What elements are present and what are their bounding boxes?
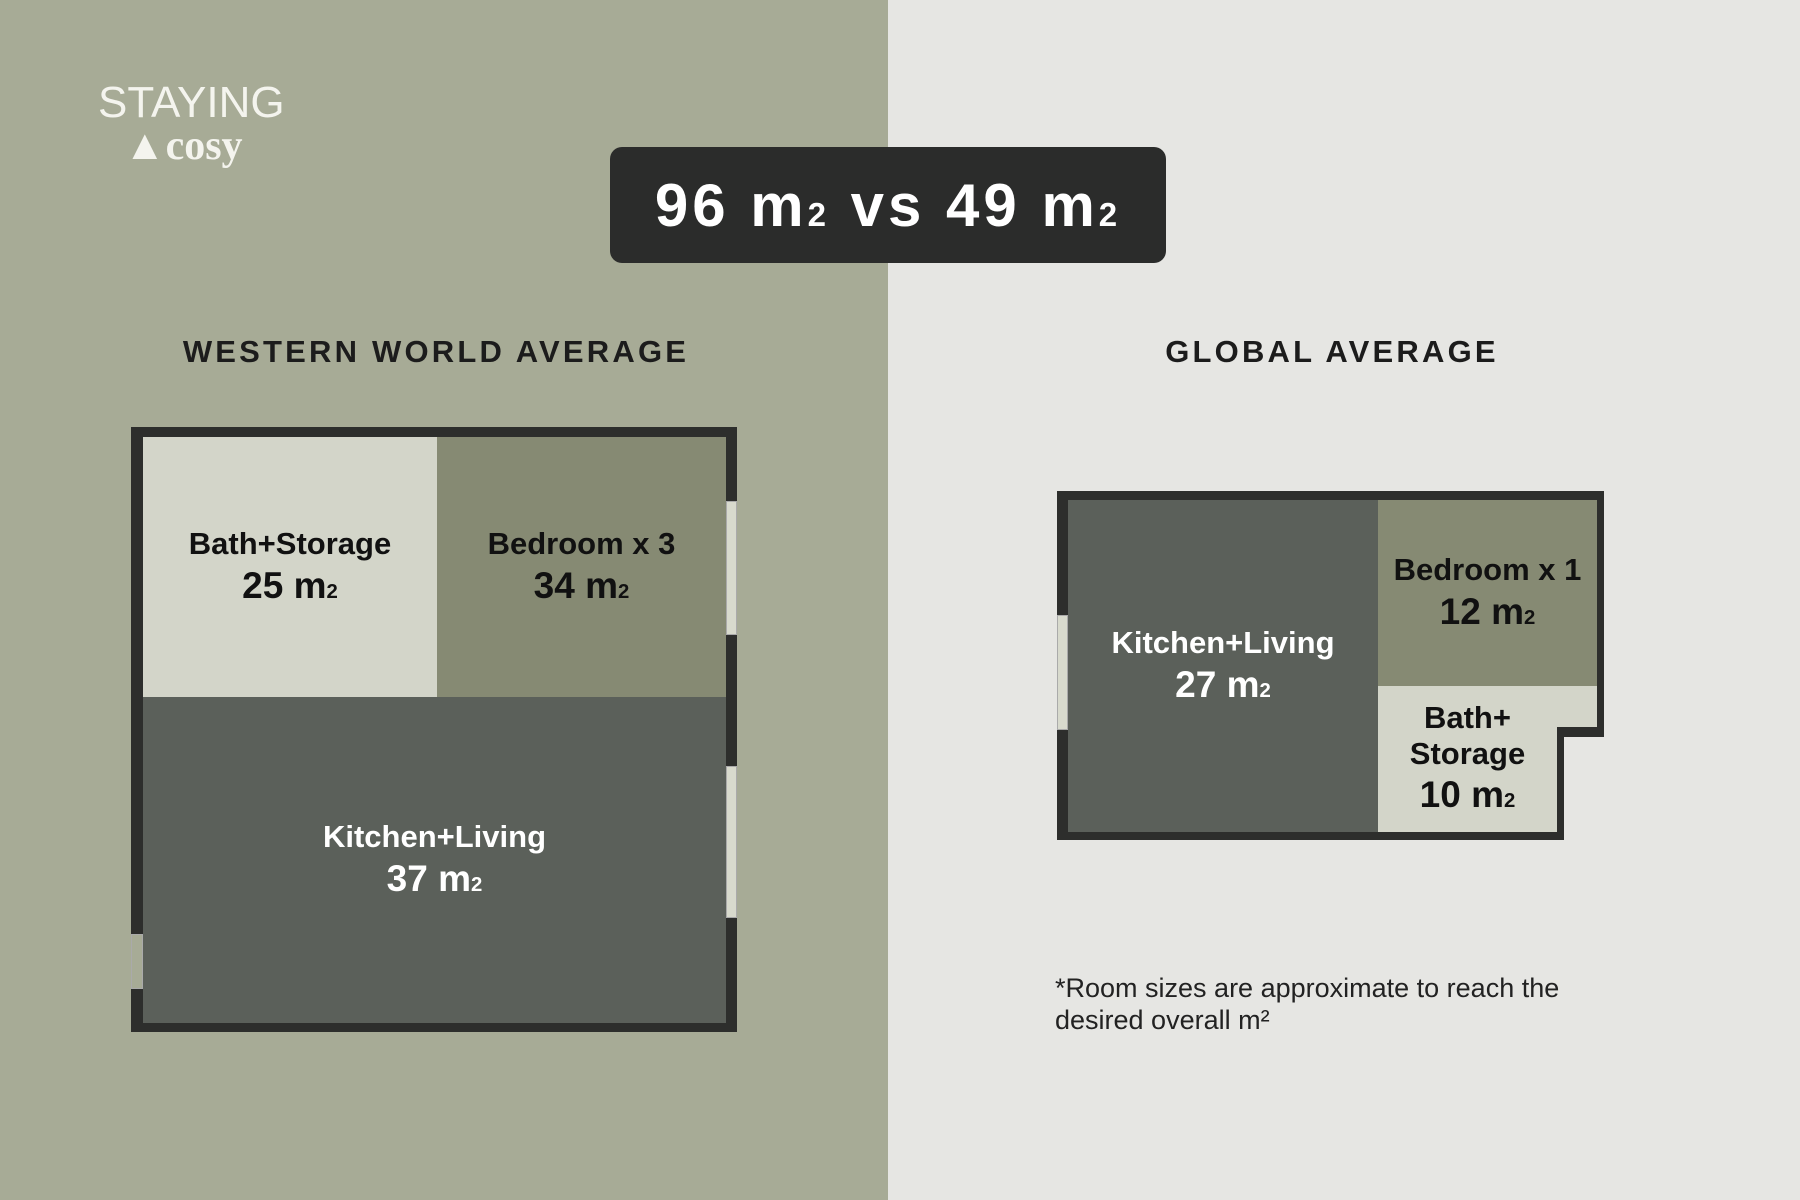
left background panel xyxy=(0,0,888,1200)
room: kitchen living: 27 m2 xyxy=(1175,664,1271,705)
room: bedroom xyxy=(437,437,726,697)
room: bedroom: Bedroom x 3 xyxy=(488,526,675,560)
title box: 96 m2 vs 49 m2 xyxy=(655,172,1121,238)
logo xyxy=(98,78,285,169)
heading: global: GLOBAL AVERAGE xyxy=(1165,334,1499,369)
room: bedroom: 12 m2 xyxy=(1440,591,1535,632)
window right top xyxy=(726,501,737,635)
floor plan: global xyxy=(1057,491,1604,840)
room: bath storage: 25 m2 xyxy=(242,565,338,606)
logo: STAYING xyxy=(98,78,285,127)
room: bedroom: Bedroom x 1 xyxy=(1394,552,1581,586)
room: kitchen living xyxy=(1068,500,1378,832)
window left xyxy=(1057,615,1068,730)
heading: western: WESTERN WORLD AVERAGE xyxy=(183,334,689,369)
door left xyxy=(131,934,143,989)
footnote: *Room sizes are approximate to reach the desired overall m² xyxy=(1055,973,1559,1035)
room: bath storage xyxy=(1378,686,1597,727)
room: bedroom xyxy=(1378,500,1597,686)
room: bedroom: 34 m2 xyxy=(534,565,629,606)
floor plan: global: 10 m2 xyxy=(1420,774,1515,815)
logo: ▲cosy xyxy=(124,123,243,169)
window right bottom xyxy=(726,766,737,918)
floor plan: global: Bath+ xyxy=(1424,700,1511,735)
room: kitchen living xyxy=(143,697,726,1023)
room: bath storage xyxy=(143,437,437,697)
room: kitchen living: Kitchen+Living xyxy=(1111,624,1335,660)
title box xyxy=(610,147,1166,263)
room: kitchen living: 37 m2 xyxy=(387,858,482,899)
floor plan: global: Storage xyxy=(1410,736,1525,771)
room: kitchen living: Kitchen+Living xyxy=(323,818,546,854)
room: bath storage: Bath+Storage xyxy=(189,526,391,560)
floor plan: western xyxy=(131,427,737,1032)
